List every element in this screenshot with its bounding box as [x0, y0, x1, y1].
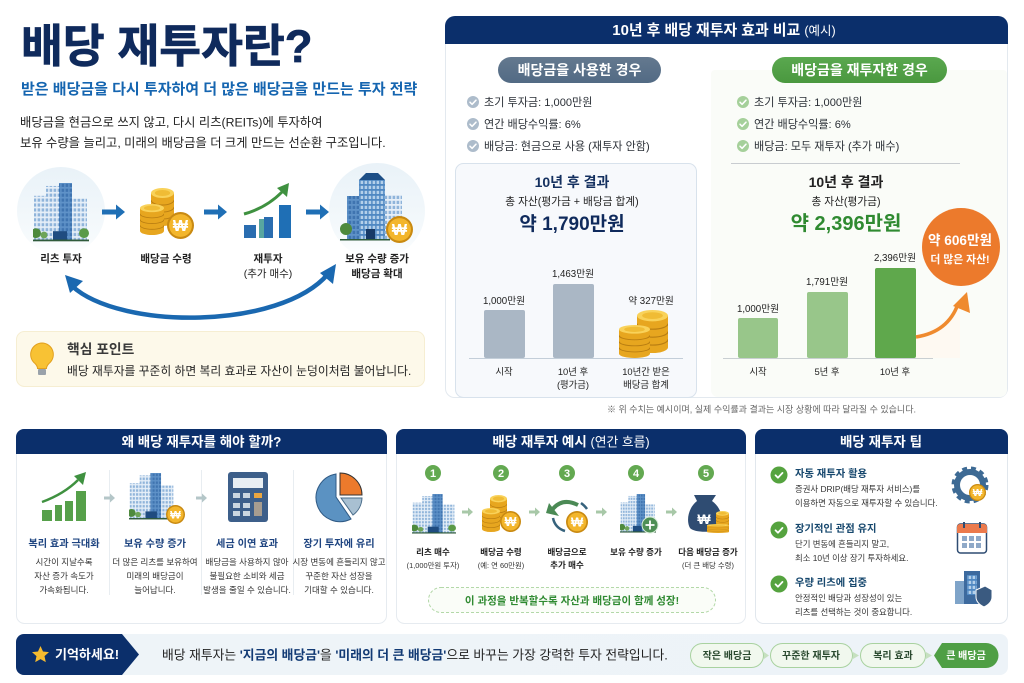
bar chart: dividends reinvested: 10년 후	[880, 366, 911, 377]
tip 2: 단기 변동에 흔들리지 말고,	[795, 539, 889, 549]
panel header	[445, 16, 1008, 44]
callout heading: 핵심 포인트	[67, 342, 135, 357]
bar chart: dividends spent	[469, 268, 683, 390]
panel header: 10년 후 배당 재투자 효과 비교 (예시)	[612, 22, 836, 39]
icon: REIT building	[17, 167, 105, 255]
bar chart: dividends reinvested: 2,396만원	[874, 252, 916, 264]
checklist: dividends spent: 연간 배당수익률: 6%	[484, 118, 581, 131]
flow pills: 꾸준한 재투자	[782, 649, 840, 662]
column text 3: 불필요한 소비와 세금	[209, 571, 285, 581]
tip 3: 우량 리츠에 집중	[795, 576, 868, 589]
step labels	[40, 252, 409, 280]
column text 2: 미래의 배당금이	[126, 571, 184, 581]
callout: key point	[16, 332, 424, 386]
step labels: 리츠 매수	[416, 547, 450, 557]
column text 2	[112, 537, 198, 595]
banner message: 배당 재투자는 '지금의 배당금'을 '미래의 더 큰 배당금'으로 바꾸는 가장 강력한 투자 전략입니다.	[162, 648, 668, 662]
arrow: feedback loop	[65, 264, 336, 318]
icon: reinvest cycle	[546, 502, 588, 533]
step labels: (1,000만원 투자)	[407, 561, 459, 570]
checklist: dividends reinvested: 배당금: 모두 재투자 (추가 매수)	[754, 140, 899, 153]
column text 1: 복리 효과 극대화	[28, 537, 100, 550]
bar chart: dividends spent: (평가금)	[557, 379, 589, 390]
callout: extra assets: 더 많은 자산!	[930, 252, 990, 266]
callout text: 배당 재투자를 꾸준히 하면 복리 효과로 자산이 눈덩이처럼 불어납니다.	[67, 364, 411, 378]
arrow	[102, 204, 125, 220]
tip 3: 리츠를 선택하는 것이 중요합니다.	[795, 607, 912, 617]
tip 1: 증권사 DRIP(배당 재투자 서비스)를	[795, 484, 920, 494]
icon: dividend coins	[482, 495, 521, 532]
icon: light bulb	[31, 343, 53, 375]
heading: dividends reinvested: 배당금을 재투자한 경우	[791, 62, 928, 78]
column text 4	[292, 537, 386, 595]
tip 2: 최소 10년 이상 장기 투자하세요.	[795, 553, 908, 563]
column text 1	[28, 537, 100, 595]
step labels: 리츠 투자	[40, 252, 82, 265]
step labels: (예: 연 60만원)	[478, 561, 524, 570]
step labels	[407, 547, 738, 570]
bar chart: dividends spent: 10년 후	[558, 366, 589, 377]
tip 1: 이용하면 자동으로 재투자할 수 있습니다.	[795, 498, 938, 508]
checklist: dividends spent: 배당금: 현금으로 사용 (재투자 안함)	[484, 140, 650, 153]
step labels: 배당금 수령	[140, 252, 192, 265]
icon: buy REIT	[410, 494, 456, 534]
badge: remember: 기억하세요!	[55, 647, 119, 662]
step numbers: 4	[633, 468, 640, 480]
icon: coins	[140, 188, 194, 239]
icon: money bag: ₩	[697, 511, 711, 527]
banner: remember	[16, 634, 1008, 675]
callout: growth message: 이 과정을 반복할수록 자산과 배당금이 함께 성장!	[465, 594, 679, 607]
step labels: (더 큰 배당 수령)	[682, 561, 734, 570]
flow pills	[690, 643, 998, 668]
step labels: 보유 수량 증가	[610, 547, 662, 557]
tip 1: 자동 재투자 활용	[795, 467, 868, 480]
tip 3: 안정적인 배당과 성장성이 있는	[795, 593, 902, 603]
icon: compound growth	[42, 472, 86, 521]
column text 4: 장기 투자에 유리	[303, 537, 375, 550]
column text 2: 늘어납니다.	[134, 585, 176, 595]
result box: dividends spent	[456, 164, 696, 398]
panel header: 왜 배당 재투자를 해야 할까?	[122, 434, 281, 450]
step numbers: 1	[430, 468, 436, 480]
arrow	[529, 508, 540, 516]
tip 2: 장기적인 관점 유지	[795, 522, 877, 535]
bar chart: dividends spent: 1,000만원	[483, 295, 525, 307]
column text 1: 시간이 지날수록	[35, 557, 93, 567]
flow pills: 작은 배당금	[703, 649, 751, 662]
bar chart: dividends reinvested: 시작	[749, 366, 767, 377]
step labels: 재투자	[254, 252, 283, 265]
result: dividends reinvested	[791, 174, 901, 235]
panel header: 배당 재투자 예시 (연간 흐름)	[492, 434, 650, 450]
checklist: dividends spent	[467, 96, 650, 153]
column: dividends reinvested	[711, 57, 1007, 397]
icon: pie chart	[316, 473, 362, 522]
column text 4: 기대할 수 있습니다.	[304, 585, 374, 595]
icon: more holdings	[619, 494, 658, 533]
arrow	[204, 204, 227, 220]
panel: 10-year comparison	[445, 16, 1008, 398]
column text 3: 발생을 줄일 수 있습니다.	[203, 585, 291, 595]
bar chart: dividends spent: 1,463만원	[552, 268, 594, 280]
reinvestment cycle diagram	[17, 163, 425, 318]
arrow	[462, 508, 473, 516]
column text 2: 보유 수량 증가	[124, 537, 187, 550]
icon: gear	[953, 468, 987, 502]
result: dividends reinvested: 10년 후 결과	[809, 174, 884, 190]
panel header	[755, 429, 1008, 454]
arrow	[104, 494, 115, 502]
column text 2: 더 많은 리츠를 보유하여	[112, 557, 198, 567]
title: 배당 재투자란?	[21, 21, 313, 72]
heading: dividends spent: 배당금을 사용한 경우	[518, 62, 641, 78]
bar chart: dividends reinvested: 1,791만원	[806, 276, 848, 288]
arrow	[196, 494, 207, 502]
arrow	[666, 508, 677, 516]
checklist: dividends reinvested: 초기 투자금: 1,000만원	[754, 96, 862, 109]
panel header	[16, 429, 387, 454]
footnote: ※ 위 수치는 예시이며, 실제 수익률과 결과는 시장 상황에 따라 달라질 수 있습니다.	[607, 404, 916, 414]
step labels: 배당금으로	[547, 547, 587, 557]
arrow: orange gain	[916, 292, 970, 337]
column text 1: 가속화됩니다.	[39, 585, 89, 595]
step labels: 배당금 확대	[351, 267, 403, 280]
step labels: 다음 배당금 증가	[678, 547, 738, 557]
bar chart: dividends spent: 시작	[495, 366, 513, 377]
panel: why reinvest	[16, 429, 387, 624]
intro text: 보유 수량을 늘리고, 미래의 배당금을 더 크게 만드는 선순환 구조입니다.	[20, 136, 386, 150]
arrow	[596, 508, 607, 516]
result box: dividends spent: 10년 후 결과	[535, 174, 610, 190]
panel header	[396, 429, 746, 454]
callout: growth message	[428, 588, 716, 612]
tip 2	[770, 522, 908, 563]
icon: building and shield	[955, 571, 992, 607]
result: dividends reinvested: 총 자산(평가금)	[811, 196, 881, 208]
tip 1	[770, 466, 938, 508]
heading: dividends spent	[498, 57, 661, 83]
step numbers: 5	[703, 468, 709, 480]
result box: dividends spent: 총 자산(평가금 + 배당금 합계)	[505, 196, 639, 208]
step numbers: 3	[564, 468, 570, 480]
column text 3: 배당금을 사용하지 않아	[206, 557, 289, 567]
column text 1: 자산 증가 속도가	[34, 571, 94, 581]
flow pills: 큰 배당금	[946, 649, 986, 662]
bar chart: dividends spent: 배당금 합계	[623, 379, 669, 390]
heading: dividends reinvested	[772, 57, 947, 83]
bar chart: dividends spent: 약 327만원	[628, 295, 674, 307]
icon: calendar	[957, 522, 987, 553]
panel header: 배당 재투자 팁	[840, 434, 922, 450]
panel: reinvestment example	[396, 429, 746, 624]
step labels: 보유 수량 증가	[345, 252, 409, 265]
intro text: 배당금을 현금으로 쓰지 않고, 다시 리츠(REITs)에 투자하여	[20, 116, 322, 130]
icon: more holdings	[127, 473, 185, 524]
step labels: (추가 매수)	[244, 268, 292, 280]
subtitle: 받은 배당금을 다시 투자하여 더 많은 배당금을 만드는 투자 전략	[21, 81, 418, 98]
step numbers: 2	[498, 468, 504, 480]
flow pills: 복리 효과	[873, 649, 913, 662]
icon: larger holdings	[329, 163, 425, 259]
result: dividends reinvested: 약 2,396만원	[791, 212, 901, 235]
tip 3	[770, 576, 912, 617]
bar chart: dividends reinvested: 5년 후	[814, 366, 840, 377]
step labels: 추가 매수	[550, 560, 584, 570]
bar chart: dividends reinvested: 1,000만원	[737, 303, 779, 315]
step numbers	[425, 465, 714, 481]
intro text	[20, 116, 386, 150]
callout: extra assets	[922, 208, 1000, 286]
step labels: 배당금 수령	[480, 547, 522, 557]
icon: calculator	[228, 472, 268, 522]
column text 3: 세금 이연 효과	[216, 537, 279, 550]
column text 3	[203, 537, 291, 595]
column text 4: 꾸준한 자산 성장을	[305, 571, 373, 581]
bar chart: dividends spent: 10년간 받은	[622, 366, 670, 377]
callout: extra assets: 약 606만원	[928, 233, 992, 248]
result box: dividends spent: 약 1,790만원	[519, 213, 625, 235]
icon: money bag	[688, 495, 729, 533]
column text 4: 시장 변동에 흔들리지 않고	[292, 557, 386, 567]
panel: reinvestment tips	[755, 429, 1008, 624]
icon: growth chart	[244, 183, 291, 238]
badge: remember	[16, 634, 139, 675]
arrow	[306, 204, 329, 220]
checklist: dividends reinvested	[737, 96, 899, 153]
bar chart: dividends reinvested	[723, 252, 960, 377]
checklist: dividends spent: 초기 투자금: 1,000만원	[484, 96, 592, 109]
checklist: dividends reinvested: 연간 배당수익률: 6%	[754, 118, 851, 131]
